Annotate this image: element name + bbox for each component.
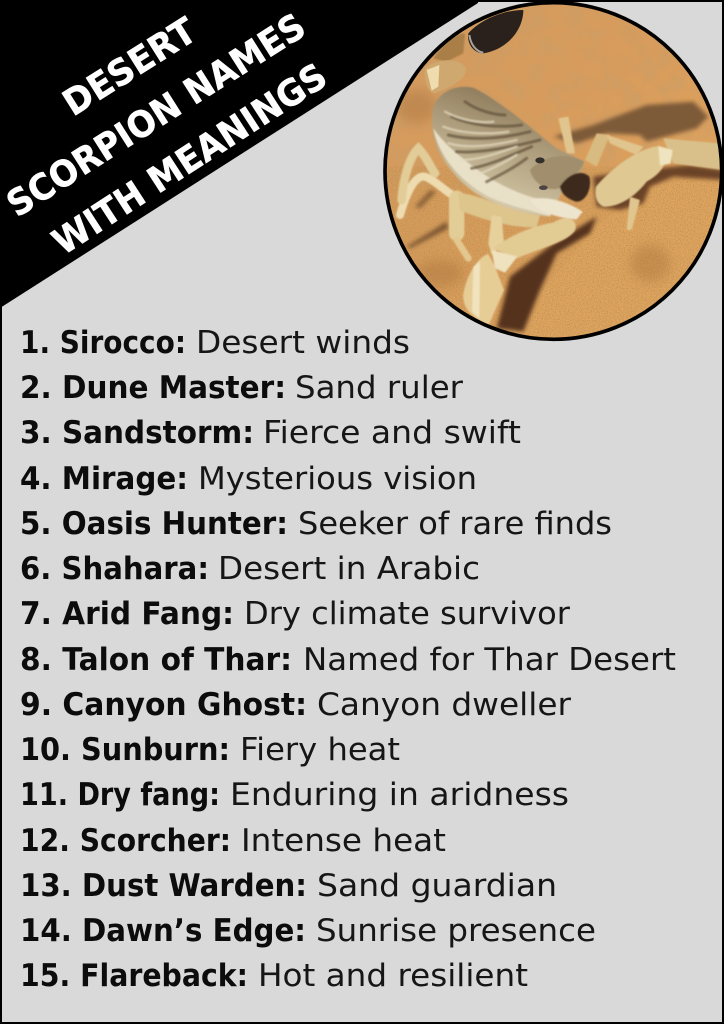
black title banner <box>0 0 478 308</box>
item 15: 15. Flareback: <box>20 958 248 994</box>
item 6: 6. Shahara: <box>20 551 209 587</box>
item 9 <box>20 687 571 723</box>
item 6 <box>20 551 480 587</box>
item 11 <box>20 777 569 813</box>
item 6: Desert in Arabic <box>218 551 480 587</box>
item 2: Sand ruler <box>295 370 463 406</box>
item 14: Sunrise presence <box>316 913 596 949</box>
item 15 <box>20 958 528 994</box>
item 12: Intense heat <box>241 823 446 859</box>
item 13: Sand guardian <box>317 868 557 904</box>
item 11: Enduring in aridness <box>230 777 569 813</box>
item 14 <box>20 913 596 949</box>
item 4: Mysterious vision <box>198 461 477 497</box>
item 10: Fiery heat <box>240 732 400 768</box>
item 13 <box>20 868 557 904</box>
item 3 <box>20 415 521 451</box>
item 2 <box>20 370 463 406</box>
right claw <box>595 146 673 207</box>
shadows <box>407 102 723 332</box>
item 15: Hot and resilient <box>258 958 528 994</box>
item 12: 12. Scorcher: <box>20 823 231 859</box>
item 8: Named for Thar Desert <box>303 642 676 678</box>
item 10 <box>20 732 400 768</box>
photo: desert scorpion in a circle <box>380 0 724 344</box>
item 9: Canyon dweller <box>317 687 571 723</box>
item 8 <box>20 642 676 678</box>
item 12 <box>20 823 446 859</box>
title: SCORPION NAMES <box>0 6 313 226</box>
item 5 <box>20 506 612 542</box>
item 7: Dry climate survivor <box>244 596 570 632</box>
item 11: 11. Dry fang: <box>20 777 220 813</box>
item 4: 4. Mirage: <box>20 461 188 497</box>
title: WITH MEANINGS <box>46 56 335 264</box>
item 9: 9. Canyon Ghost: <box>20 687 307 723</box>
item 3: 3. Sandstorm: <box>20 415 254 451</box>
item 14: 14. Dawn’s Edge: <box>20 913 306 949</box>
scorpion body <box>432 87 584 217</box>
item 4 <box>20 461 477 497</box>
left legs <box>400 148 468 258</box>
item 7: 7. Arid Fang: <box>20 596 234 632</box>
item 13: 13. Dust Warden: <box>20 868 307 904</box>
item 1: Desert winds <box>196 325 410 361</box>
sand <box>380 0 724 344</box>
item 7 <box>20 596 570 632</box>
far legs <box>558 117 723 230</box>
item 5: Seeker of rare finds <box>298 506 612 542</box>
item 10: 10. Sunburn: <box>20 732 230 768</box>
body ribs <box>443 102 540 182</box>
stinger <box>425 10 523 93</box>
list of scorpion names <box>20 325 676 994</box>
item 5: 5. Oasis Hunter: <box>20 506 288 542</box>
title: DESERT <box>56 10 204 125</box>
item 2: 2. Dune Master: <box>20 370 286 406</box>
item 1: 1. Sirocco: <box>20 325 186 361</box>
item 3: Fierce and swift <box>263 415 521 451</box>
item 8: 8. Talon of Thar: <box>20 642 292 678</box>
head and mouth <box>530 156 590 219</box>
front pincer arm <box>458 193 576 326</box>
photo ring <box>385 3 722 339</box>
item 1 <box>20 325 410 361</box>
